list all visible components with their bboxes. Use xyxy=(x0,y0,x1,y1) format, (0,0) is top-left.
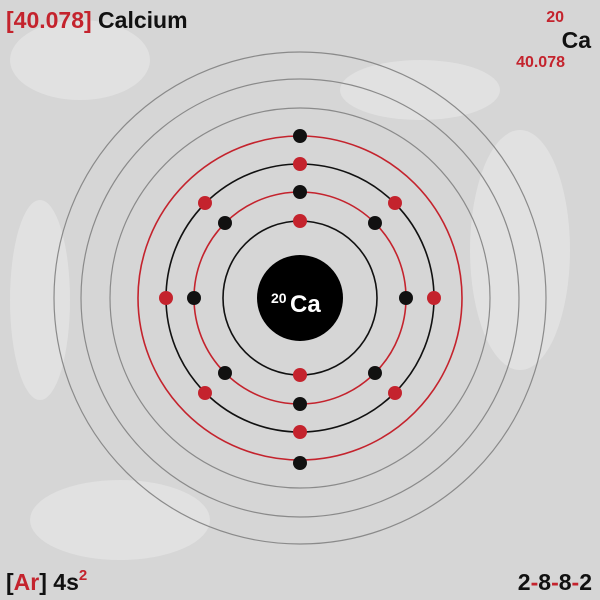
electron configuration: [Ar] 4s xyxy=(6,569,79,595)
shell counts: 2-8-8-2 xyxy=(518,569,592,595)
nucleus xyxy=(257,255,343,341)
outer gray orbits xyxy=(54,52,546,544)
element card: 40.078 xyxy=(516,54,565,71)
nucleus: Ca xyxy=(290,291,321,318)
element card: Ca xyxy=(562,27,591,53)
electron configuration: 2 xyxy=(79,567,87,584)
electron shells xyxy=(138,136,462,460)
nucleus: 20 xyxy=(271,290,287,306)
element card: 20 xyxy=(546,9,564,26)
element card xyxy=(516,9,591,71)
electrons xyxy=(159,129,441,470)
title: [40.078] Calcium xyxy=(6,7,188,33)
